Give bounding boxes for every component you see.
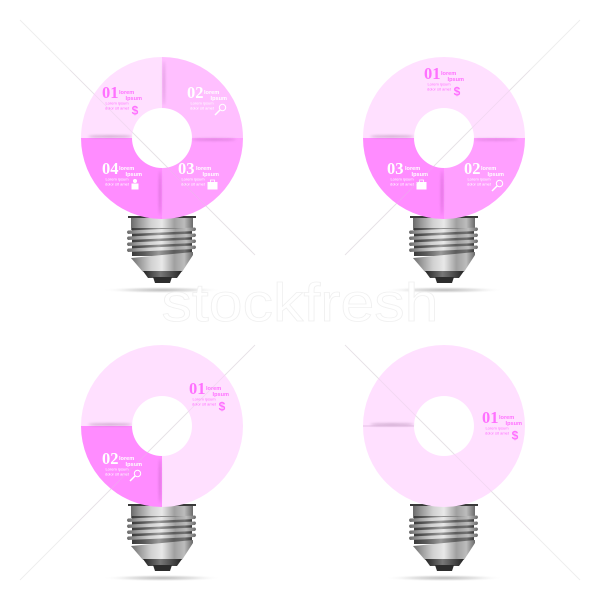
label 02: Ipsum	[126, 462, 142, 468]
bulb 4: single segment donut	[363, 345, 525, 582]
label 01	[102, 83, 142, 118]
label 02: lorem	[119, 456, 134, 462]
bulb 2: three segment donut	[363, 57, 525, 294]
label 03: 03	[387, 159, 404, 178]
label 01: Lorem ipsum	[427, 82, 451, 86]
label 01: lorem	[206, 386, 221, 392]
label 01: $	[219, 400, 226, 414]
label 03: 03	[178, 159, 194, 178]
label 01: 01	[482, 408, 498, 427]
label 01: Ipsum	[506, 421, 522, 427]
label 03: dolor sit amet	[181, 182, 206, 186]
label 04: 04	[102, 159, 118, 178]
label 02: Ipsum	[488, 172, 504, 178]
label 02: dolor sit amet	[467, 182, 492, 186]
label 01: lorem	[441, 71, 456, 77]
label 01	[189, 379, 229, 414]
label 01: dolor sit amet	[105, 106, 130, 110]
label 02: 02	[464, 159, 480, 178]
label 01: $	[454, 84, 461, 98]
label 01: 01	[424, 64, 440, 83]
label 02: Lorem ipsum	[105, 466, 129, 472]
label 04: Lorem ipsum	[105, 176, 129, 182]
bulb 1: four segment donut	[81, 57, 243, 294]
donut 3	[81, 345, 243, 507]
lamp base 3	[102, 504, 222, 582]
donut 2	[363, 57, 525, 219]
label 02	[464, 159, 504, 191]
bulb 3: two segment donut	[81, 345, 243, 582]
label 01: $	[512, 428, 519, 442]
donut 4	[363, 345, 525, 507]
label 03: Lorem ipsum	[390, 176, 414, 182]
label 02: 02	[187, 83, 204, 102]
label 04	[102, 159, 142, 190]
label 02: lorem	[204, 90, 219, 96]
label 03: lorem	[196, 166, 211, 172]
label 01: Lorem ipsum	[192, 396, 216, 402]
label 01: Lorem ipsum	[485, 426, 509, 430]
label 02: Lorem ipsum	[190, 100, 214, 106]
label 03	[178, 159, 219, 190]
label 01: dolor sit amet	[427, 86, 452, 92]
label 04: lorem	[119, 166, 134, 172]
label 01: dolor sit amet	[485, 430, 510, 436]
label 01: $	[132, 104, 139, 118]
label 01: lorem	[119, 90, 134, 96]
label 02	[102, 449, 142, 481]
donut 1	[81, 57, 243, 219]
label 01: lorem	[499, 415, 514, 421]
label 02: dolor sit amet	[105, 472, 130, 476]
label 02: dolor sit amet	[190, 106, 215, 110]
label 02: lorem	[481, 166, 496, 172]
label 01: 01	[189, 379, 206, 398]
lamp base 1	[102, 216, 222, 294]
label 01: Ipsum	[213, 392, 229, 398]
label 03: lorem	[405, 166, 420, 172]
label 03: dolor sit amet	[390, 182, 415, 186]
label 04: dolor sit amet	[105, 182, 130, 186]
label 03: Ipsum	[412, 172, 428, 178]
label 01: Lorem ipsum	[105, 100, 129, 106]
label 01: 01	[102, 83, 118, 102]
label 04: Ipsum	[126, 172, 142, 178]
label 03	[387, 159, 428, 190]
label 03: Ipsum	[203, 172, 219, 178]
label 02: Lorem ipsum	[467, 176, 491, 182]
label 03: Lorem ipsum	[181, 176, 205, 182]
diagonal watermark lines over discs	[70, 70, 530, 530]
label 01	[482, 408, 522, 442]
label 01: Ipsum	[448, 77, 464, 83]
watermark: stockfresh: stockfresh	[162, 273, 438, 333]
lamp base 4	[384, 504, 504, 582]
label 02	[187, 83, 227, 115]
label 02: 02	[102, 449, 118, 468]
label 01: dolor sit amet	[192, 402, 217, 406]
label 01: Ipsum	[126, 96, 142, 102]
label 02: Ipsum	[211, 96, 227, 102]
lamp base 2	[384, 216, 504, 294]
label 01	[424, 64, 464, 98]
